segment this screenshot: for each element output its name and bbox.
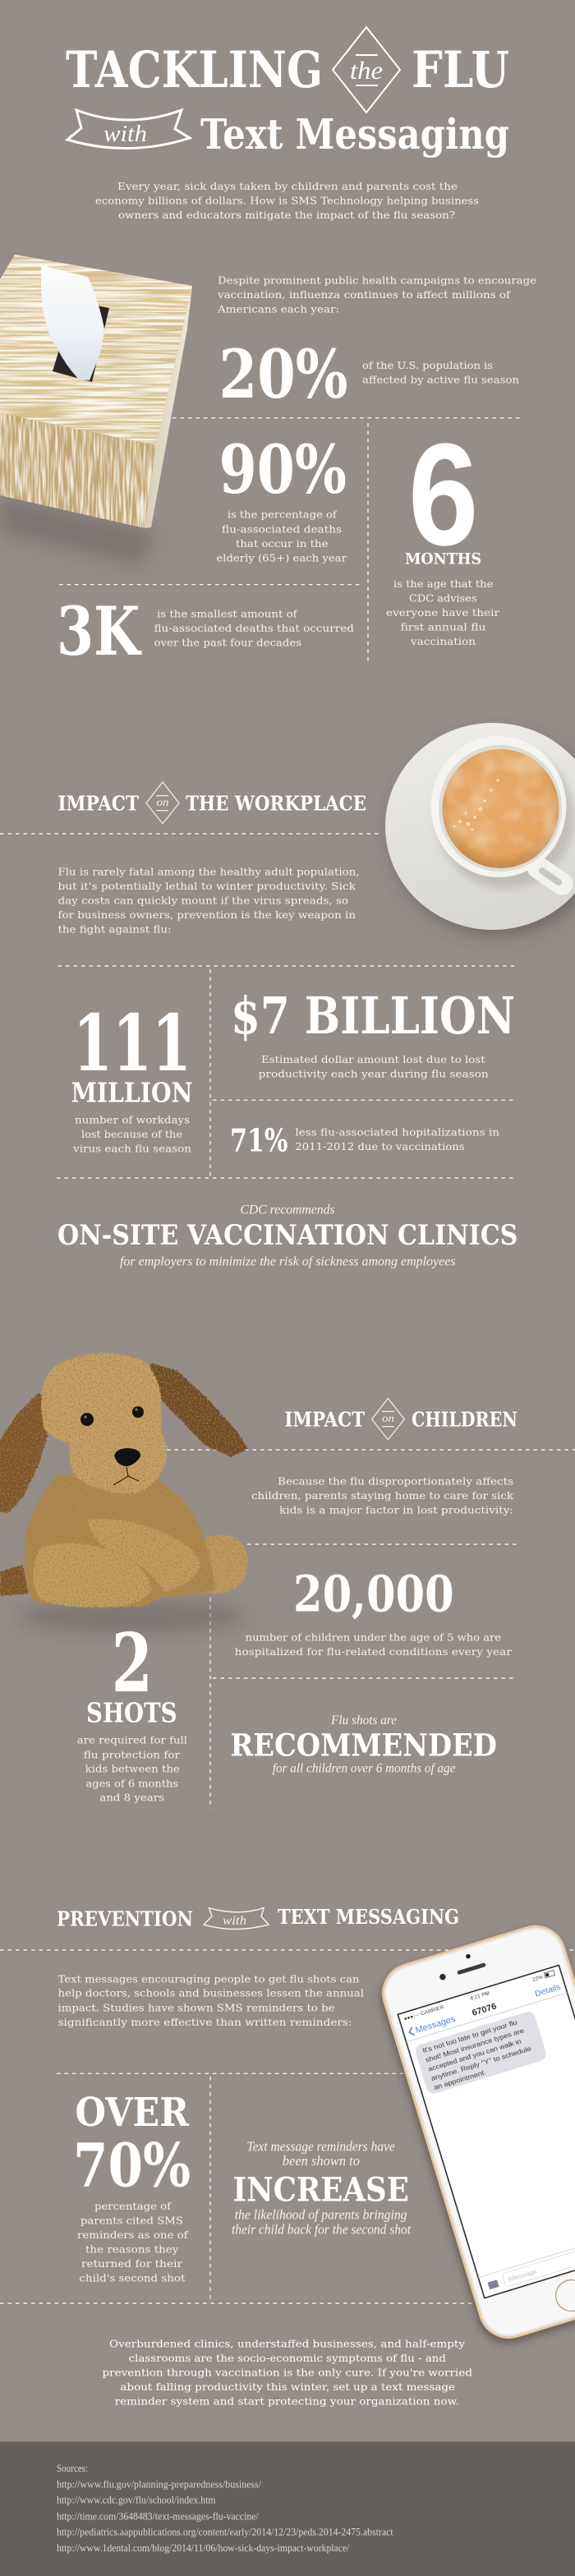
icon: diamond with the bbox=[333, 27, 400, 113]
sources list: http://time.com/3648483/text-messages-flu-vaccine/ bbox=[57, 2509, 259, 2522]
heading: prevention with text messaging: PREVENTION bbox=[57, 1907, 193, 1930]
stat: 6 months: CDC advises bbox=[409, 592, 477, 605]
phone toolbar bbox=[478, 2229, 575, 2294]
stat: 20,000: number of children under the age of 5 who are bbox=[246, 1631, 501, 1644]
message text: It's not too late to get your flu bbox=[421, 2018, 518, 2054]
text: children paragraph bbox=[251, 1474, 513, 1516]
stat: 2 shots bbox=[77, 1617, 187, 1804]
stat: 90 percent: is the percentage of bbox=[228, 508, 338, 521]
image: smartphone with text message: Messages bbox=[414, 2014, 457, 2036]
sources list: http://www.1dental.com/blog/2014/11/06/how-sick-days-impact-workplace/ bbox=[57, 2542, 350, 2554]
stat: 90 percent bbox=[216, 431, 347, 564]
text: children paragraph: children, parents staying home to care for sick bbox=[251, 1489, 513, 1502]
phone status bar: ●●●○○ CARRIER bbox=[403, 2004, 445, 2022]
sources list: http://www.flu.gov/planning-preparedness/business/ bbox=[57, 2477, 261, 2490]
text: prevention paragraph: significantly more effective than written reminders: bbox=[58, 2016, 352, 2028]
stat: over 70 percent: the reasons they bbox=[85, 2243, 179, 2256]
stat: over 70 percent: child's second shot bbox=[79, 2272, 185, 2284]
stat: 111 million: virus each flu season bbox=[72, 1142, 191, 1154]
heading: impact on children: CHILDREN bbox=[412, 1408, 518, 1432]
callout: on-site vaccination clinics bbox=[58, 1203, 518, 1269]
stat: 90 percent: elderly (65+) each year bbox=[216, 551, 347, 564]
stat: 20,000: hospitalized for flu-related conditions every year bbox=[235, 1645, 512, 1658]
panel: sources footer bbox=[0, 2441, 575, 2576]
stat: 111 million: MILLION bbox=[71, 1077, 192, 1109]
title word: flu: FLU bbox=[412, 41, 509, 99]
stat: 7 billion dollars: Estimated dollar amount lost due to lost bbox=[261, 1053, 485, 1065]
text: prevention paragraph: help doctors, schools and businesses lessen the annual bbox=[58, 1987, 364, 1999]
callout: on-site vaccination clinics: ON-SITE VACCINATION CLINICS bbox=[58, 1219, 518, 1251]
sources list: http://pediatrics.aappublications.org/content/early/2014/12/23/peds.2014-2475.abstract bbox=[57, 2526, 393, 2538]
phone navigation bar bbox=[408, 2027, 415, 2036]
text: workplace paragraph: Flu is rarely fatal among the healthy adult population, bbox=[58, 866, 360, 878]
icon: diamond with on bbox=[372, 1398, 404, 1440]
intro text: economy billions of dollars. How is SMS Technology helping business bbox=[95, 194, 479, 207]
text: closing paragraph: reminder system and start protecting your organization now. bbox=[115, 2394, 459, 2407]
image: tissue box bbox=[0, 255, 192, 567]
text: children paragraph: Because the flu disproportionately affects bbox=[278, 1474, 513, 1487]
stat: 111 million bbox=[71, 998, 192, 1154]
text: workplace paragraph: for business owners, prevention is the key weapon in bbox=[58, 908, 356, 921]
callout: increase: been shown to bbox=[283, 2153, 360, 2169]
stat: over 70 percent: 70% bbox=[73, 2131, 191, 2201]
icon: diamond with on: on bbox=[382, 1413, 394, 1425]
phone screen bbox=[398, 1965, 575, 2298]
heading: prevention with text messaging: TEXT MESSAGING bbox=[278, 1905, 459, 1929]
callout: on-site vaccination clinics: CDC recommends bbox=[240, 1203, 335, 1217]
phone toolbar: iMessage bbox=[507, 2267, 538, 2284]
text: workplace paragraph: but it's potentially lethal to winter productivity. Sick bbox=[58, 880, 356, 892]
message text bbox=[421, 2016, 535, 2091]
stat: 2 shots: and 8 years bbox=[99, 1792, 164, 1804]
stat: over 70 percent: parents cited SMS bbox=[80, 2215, 183, 2227]
stat: 71 percent: less flu-associated hopitalizations in bbox=[295, 1126, 499, 1138]
stat: 3K: over the past four decades bbox=[154, 637, 301, 649]
text: closing paragraph bbox=[102, 2337, 472, 2407]
stat: over 70 percent: returned for their bbox=[81, 2257, 182, 2270]
icon: diamond with the: the bbox=[350, 56, 383, 85]
stat: 20,000 bbox=[235, 1566, 512, 1658]
stat: over 70 percent: percentage of bbox=[94, 2200, 172, 2212]
title line: text messaging: Text Messaging bbox=[200, 110, 509, 159]
block: flu facts intro bbox=[217, 274, 536, 315]
heading: impact on children bbox=[284, 1398, 518, 1440]
text: workplace paragraph: the fight against flu: bbox=[58, 922, 171, 935]
stat: 20,000: 20,000 bbox=[293, 1566, 454, 1624]
heading: impact on the workplace bbox=[58, 782, 366, 824]
image: smartphone with text message: 22% bbox=[531, 1974, 544, 1983]
intro text bbox=[95, 180, 479, 221]
stat: 90 percent: 90% bbox=[218, 431, 347, 509]
icon: small banner with bbox=[204, 1908, 269, 1929]
stat: 2 shots: SHOTS bbox=[86, 1697, 177, 1729]
stat: 20 percent: affected by active flu season bbox=[362, 374, 519, 386]
stat: 6 months: 6 bbox=[408, 413, 478, 576]
phone home button bbox=[552, 2276, 575, 2315]
stat: 71 percent: 71% bbox=[230, 1122, 288, 1158]
callout: increase: INCREASE bbox=[233, 2170, 409, 2209]
image: smartphone with text message: 67076 bbox=[471, 2002, 498, 2018]
image: coffee cup on saucer bbox=[385, 723, 575, 936]
block: flu facts intro: Americans each year: bbox=[217, 303, 339, 315]
text: workplace paragraph: day costs can quickly mount if the virus spreads, so bbox=[58, 895, 348, 907]
stat: 6 months: everyone have their bbox=[386, 606, 499, 619]
stat: 2 shots: 2 bbox=[112, 1617, 153, 1711]
stat: 6 months bbox=[386, 413, 499, 647]
text: prevention paragraph: Text messages encouraging people to get flu shots can bbox=[58, 1972, 360, 1985]
stat: 3K: is the smallest amount of bbox=[157, 608, 298, 620]
image: smartphone with text message: Details bbox=[534, 1982, 562, 1999]
sources list bbox=[57, 2462, 393, 2554]
icon: banner with bbox=[67, 110, 190, 149]
callout: flu shots recommended: RECOMMENDED bbox=[230, 1727, 497, 1764]
icon: diamond with on bbox=[146, 782, 179, 824]
image: smartphone with text message: 4:21 PM bbox=[470, 1990, 490, 2002]
callout: increase bbox=[232, 2138, 411, 2237]
stat: 6 months: is the age that the bbox=[393, 577, 493, 590]
icon: banner with: with bbox=[104, 121, 147, 147]
image: stuffed toy dog bbox=[0, 1353, 247, 1635]
stat: 6 months: MONTHS bbox=[405, 550, 481, 568]
heading: impact on the workplace: THE WORKPLACE bbox=[186, 792, 366, 816]
stat: over 70 percent bbox=[73, 2090, 191, 2284]
callout: increase: their child back for the second shot bbox=[232, 2221, 411, 2237]
stat: 90 percent: that occur in the bbox=[236, 537, 329, 550]
stat: 2 shots: ages of 6 months bbox=[85, 1777, 178, 1789]
stat: 2 shots: kids between the bbox=[85, 1763, 180, 1775]
icon: diamond with on: on bbox=[156, 797, 169, 809]
message text: accepted and you can walk in bbox=[427, 2037, 522, 2073]
block: flu facts intro: Despite prominent public health campaigns to encourage bbox=[218, 274, 536, 287]
stat: 71 percent bbox=[230, 1122, 499, 1158]
image: smartphone with text message bbox=[376, 1919, 575, 2344]
stat: over 70 percent: OVER bbox=[76, 2090, 190, 2136]
stat: 20 percent: of the U.S. population is bbox=[362, 359, 493, 371]
message text: shot! Most insurance types are bbox=[424, 2026, 525, 2064]
stat: 6 months: vaccination bbox=[410, 635, 476, 647]
callout: flu shots recommended: for all children over 6 months of age bbox=[273, 1761, 455, 1775]
dashes behind dog bbox=[167, 1449, 575, 1451]
block: flu facts intro: vaccination, influenza continues to affect millions of bbox=[217, 288, 511, 301]
message text: anytime. Reply "Y" to schedule bbox=[430, 2044, 532, 2082]
text: workplace paragraph bbox=[58, 866, 360, 935]
stat: 90 percent: flu-associated deaths bbox=[222, 522, 342, 535]
text: prevention paragraph: impact. Studies have shown SMS reminders to be bbox=[58, 2001, 335, 2013]
heading: prevention with text messaging bbox=[57, 1905, 459, 1930]
sources list: http://www.cdc.gov/flu/school/index.htm bbox=[57, 2494, 215, 2506]
stat: 7 billion dollars: productivity each year during flu season bbox=[259, 1068, 489, 1080]
stat: 111 million: 111 bbox=[73, 998, 191, 1089]
stat: over 70 percent: reminders as one of bbox=[77, 2229, 189, 2241]
stat: 3K bbox=[57, 593, 354, 671]
stat: 111 million: lost because of the bbox=[81, 1128, 182, 1140]
title bbox=[66, 27, 509, 159]
text: closing paragraph: prevention through vaccination is the only cure. If you're worried bbox=[102, 2366, 472, 2378]
message text: an appointment. bbox=[433, 2068, 487, 2091]
text: closing paragraph: classrooms are the socio-economic symptoms of flu - and bbox=[129, 2352, 446, 2364]
stat: 7 billion dollars: $7 BILLION bbox=[231, 986, 515, 1046]
intro text: owners and educators mitigate the impact of the flu season? bbox=[118, 209, 455, 221]
message bubble bbox=[414, 2010, 548, 2095]
stat: 20 percent bbox=[218, 336, 519, 414]
text: closing paragraph: Overburdened clinics, understaffed businesses, and half-empty bbox=[109, 2337, 466, 2349]
heading: impact on children: IMPACT bbox=[284, 1408, 365, 1432]
text: children paragraph: kids is a major factor in lost productivity: bbox=[279, 1504, 513, 1516]
stat: 3K: flu-associated deaths that occurred bbox=[154, 622, 354, 634]
stat: 20 percent: 20% bbox=[218, 336, 348, 414]
heading: impact on the workplace: IMPACT bbox=[58, 792, 139, 816]
callout: flu shots recommended bbox=[230, 1714, 497, 1775]
title line: tackling: TACKLING bbox=[66, 41, 323, 99]
stat: 2 shots: are required for full bbox=[77, 1734, 187, 1746]
stat: 3K: 3K bbox=[57, 593, 142, 671]
callout: increase: Text message reminders have bbox=[246, 2138, 395, 2154]
text: prevention paragraph bbox=[58, 1972, 364, 2028]
text: closing paragraph: about falling productivity this winter, set up a text message bbox=[120, 2380, 455, 2393]
sources list: Sources: bbox=[57, 2462, 88, 2474]
stat: 6 months: first annual flu bbox=[401, 620, 486, 632]
callout: on-site vaccination clinics: for employers to minimize the risk of sickness among employees bbox=[120, 1255, 455, 1269]
callout: increase: the likelihood of parents bringing bbox=[235, 2207, 407, 2223]
intro text: Every year, sick days taken by children and parents cost the bbox=[117, 180, 458, 192]
stat: 2 shots: flu protection for bbox=[84, 1748, 180, 1760]
stat: 7 billion dollars bbox=[231, 986, 515, 1080]
icon: small banner with: with bbox=[223, 1914, 246, 1928]
stat: 111 million: number of workdays bbox=[75, 1113, 190, 1125]
stat: 71 percent: 2011-2012 due to vaccinations bbox=[295, 1140, 465, 1152]
callout: flu shots recommended: Flu shots are bbox=[330, 1714, 397, 1727]
